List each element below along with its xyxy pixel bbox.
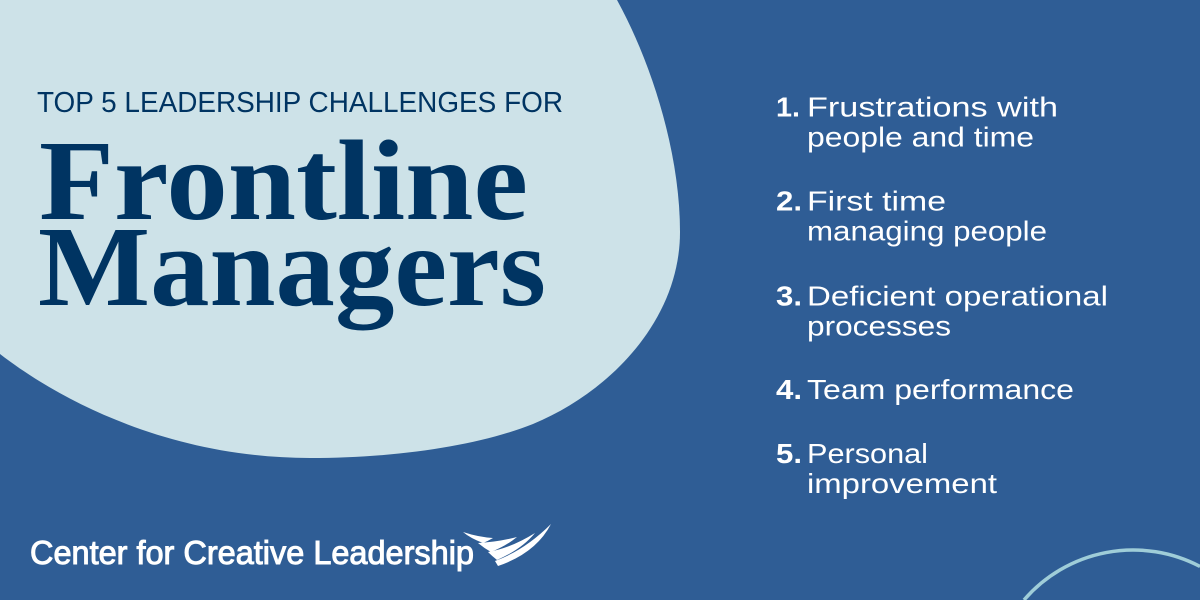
item 4: 4.	[776, 374, 802, 405]
title	[38, 117, 546, 330]
item 5	[776, 438, 997, 499]
item 3: 3.	[776, 280, 802, 312]
item 5: Personal	[807, 438, 928, 469]
item 1: people and time	[807, 122, 1034, 152]
item 3: Deficient operational	[807, 280, 1108, 312]
item 5: improvement	[807, 468, 997, 499]
icon: logo wing	[463, 524, 551, 566]
item 2	[776, 186, 1047, 246]
title: Frontline	[39, 117, 528, 244]
logo: Center for Creative Leadership	[30, 524, 551, 571]
light blob panel	[0, 0, 680, 458]
item 3	[776, 280, 1108, 342]
item 1	[776, 92, 1058, 152]
decorative arc	[1024, 550, 1200, 600]
item 5: 5.	[776, 438, 802, 469]
subtitle: TOP 5 LEADERSHIP CHALLENGES FOR	[37, 87, 563, 119]
item 3: processes	[807, 310, 951, 342]
item 4: Team performance	[807, 374, 1074, 405]
item 2: First time	[807, 186, 946, 216]
logo: Center for Creative Leadership: Center for Creative Leadership	[30, 534, 474, 571]
item 2: managing people	[807, 216, 1047, 246]
title: Managers	[38, 203, 546, 330]
item 1: 1.	[776, 92, 800, 122]
item 2: 2.	[776, 186, 802, 216]
numbered list of challenges	[776, 92, 1108, 499]
item 1: Frustrations with	[807, 92, 1058, 122]
